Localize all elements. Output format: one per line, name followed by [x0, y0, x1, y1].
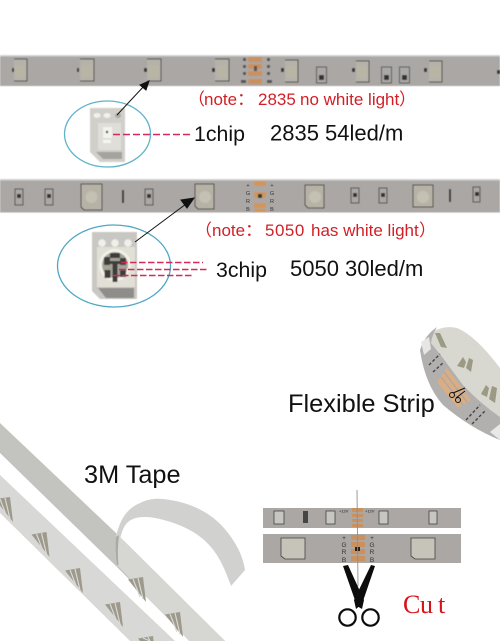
note: 2835: note： [204, 90, 254, 109]
liner marks on ring [435, 333, 497, 403]
arrow: chip to 2835 strip [117, 81, 149, 115]
pad labels on 5050 strip: + [246, 183, 250, 189]
peeled tape curl [116, 499, 245, 586]
label: Cut: Cut [403, 590, 446, 619]
label: 5050 30led/m: 5050 30led/m [290, 256, 423, 281]
note: 5050: note： [212, 221, 262, 240]
pad labels: top: +12V [339, 508, 349, 514]
flexible strip photo [420, 327, 500, 440]
pad labels: bottom: B [370, 557, 374, 564]
note: 5050: 5050 [265, 221, 305, 240]
icon: small scissors on ring [450, 388, 465, 402]
cut strip: bottom [263, 534, 461, 563]
dashed leader: 1chip [113, 134, 193, 136]
arrow: chip to 5050 strip [135, 198, 194, 242]
adhesive liner marks [0, 497, 183, 641]
upper tape strip [0, 423, 225, 641]
pad labels: bottom: B [342, 557, 346, 564]
strip: 5050 LED strip [0, 179, 500, 212]
label: Flexible Strip: Flexible Strip [288, 390, 435, 418]
label: 1chip: 1chip [194, 122, 245, 146]
printed marks beside pads [429, 354, 486, 424]
icon: 5050 chip [92, 232, 137, 299]
strip: 2835 LED strip [0, 55, 500, 86]
cut diagram [263, 490, 461, 626]
note: 5050: （ [195, 221, 212, 240]
label: 3chip: 3chip [216, 258, 267, 282]
pad labels: bottom: G [369, 542, 375, 549]
cut line [357, 490, 358, 586]
pad labels: bottom: + [370, 535, 374, 542]
icon: scissors [339, 565, 379, 626]
pad labels: bottom: R [370, 549, 375, 556]
pad labels: top [339, 508, 375, 514]
dashed leaders: 3chip [113, 262, 208, 276]
pad labels: bottom [341, 535, 375, 564]
callout: 2835 chip circle [64, 101, 150, 167]
label: 2835 54led/m: 2835 54led/m [270, 120, 403, 146]
pad labels: bottom: R [342, 549, 347, 556]
note: 2835: （ [188, 90, 205, 109]
note: 5050: ） [419, 221, 436, 240]
pad labels on 5050 strip: B [270, 207, 274, 213]
pad labels: bottom: + [342, 535, 346, 542]
note: 2835: ） [399, 90, 416, 109]
strip front of ring [420, 327, 500, 440]
light stripes in liner marks [0, 498, 180, 641]
callout: 5050 chip circle [58, 225, 170, 307]
pad labels on 5050 strip: G [270, 191, 274, 197]
pad labels on 5050 strip: + [270, 183, 274, 189]
note: 5050: has white light [311, 221, 419, 240]
pad labels: top: +12V [365, 508, 375, 514]
note: 2835: no white light [300, 90, 400, 109]
pad labels: bottom: G [341, 542, 347, 549]
tape back of ring [431, 327, 500, 417]
pad labels on 5050 strip: R [270, 199, 274, 205]
label: 3M Tape: 3M Tape [84, 461, 181, 489]
3M tape photo [0, 423, 245, 641]
cut strip: top [263, 508, 461, 528]
pad labels on 5050 strip: G [246, 191, 250, 197]
note: 2835: 2835 [258, 90, 296, 109]
icon: 2835 chip [90, 108, 125, 162]
pad labels on 5050 strip [246, 183, 274, 213]
pad labels on 5050 strip: R [246, 199, 250, 205]
lower tape strip [0, 475, 175, 641]
pad labels on 5050 strip: B [246, 207, 250, 213]
